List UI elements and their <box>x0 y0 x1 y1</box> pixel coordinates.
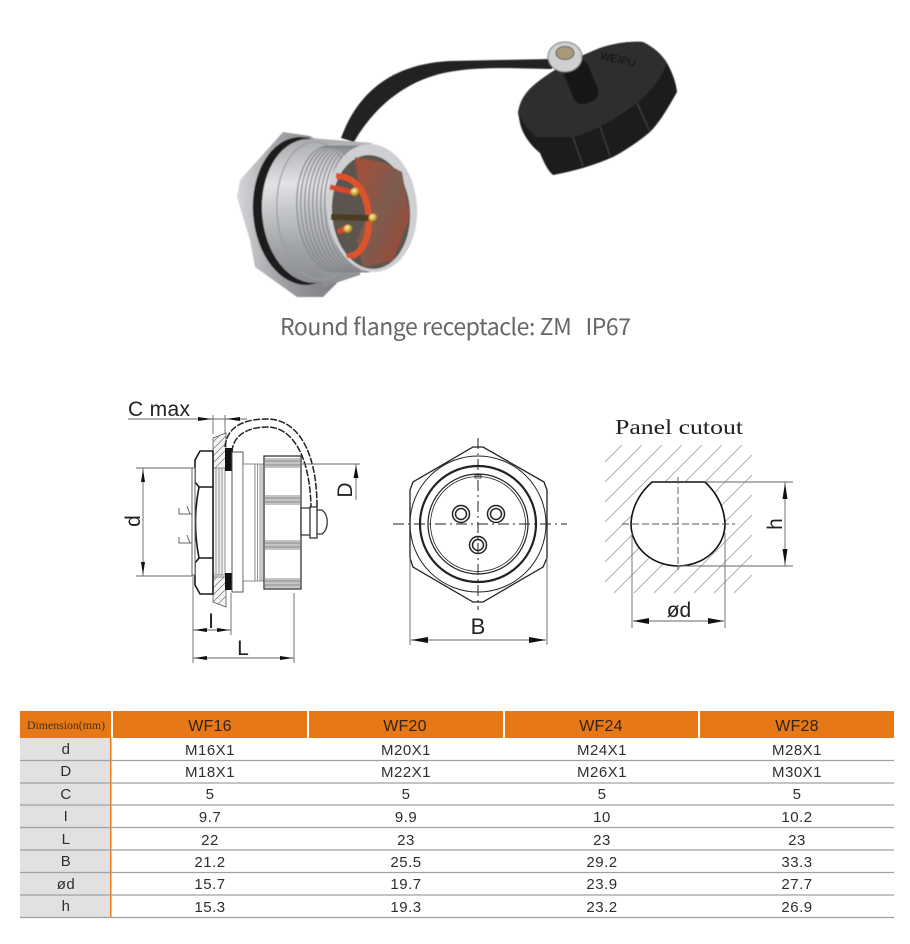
table: WF28 values: 23 <box>788 832 806 849</box>
table: WF24 values: 10 <box>593 809 611 826</box>
table: WF16 values: 21.2 <box>194 854 226 871</box>
side view: thread 2 <box>255 464 264 581</box>
table: WF16 values: 15.3 <box>194 899 226 916</box>
table: column accent <box>110 738 112 917</box>
table: WF28 values: 5 <box>793 786 801 803</box>
table: WF20 values: M22X1 <box>381 764 431 781</box>
table: WF16 values: 9.7 <box>199 809 221 826</box>
table: WF16 values: 5 <box>206 786 214 803</box>
side view: rear plate and pins <box>179 468 195 575</box>
dimension: h: h <box>764 518 787 530</box>
table: first column background <box>20 738 110 917</box>
table: WF20 values: 19.3 <box>390 899 422 916</box>
table: WF28 values <box>772 742 822 916</box>
dimension: I <box>193 575 231 663</box>
table: row labels: h <box>62 898 70 915</box>
photo: silver receptacle <box>237 132 421 297</box>
table: WF20 values <box>381 742 431 916</box>
table: WF20 values: 5 <box>402 786 410 803</box>
table: header row: WF16 <box>188 718 232 735</box>
side view: panel hatching <box>212 432 226 608</box>
table: header row: Dimension(mm) <box>27 718 105 732</box>
dimension: D <box>302 464 360 500</box>
dimension: B <box>410 558 547 645</box>
dimension: h <box>678 482 793 566</box>
dimension: ød: ød <box>667 599 691 622</box>
dimension: L <box>193 593 294 663</box>
table: WF28 values: 26.9 <box>781 899 813 916</box>
table: row labels: C <box>60 786 72 803</box>
cutout: centre lines <box>622 477 735 570</box>
product caption: Round flange receptacle: ZM IP67 <box>280 308 631 342</box>
table: WF28 values: 10.2 <box>781 809 813 826</box>
table: row labels: L <box>62 831 70 848</box>
table: header row <box>20 711 894 738</box>
table: WF16 values: M18X1 <box>185 764 235 781</box>
front view drawing <box>393 438 567 645</box>
photo: tether strap <box>341 59 552 142</box>
product photo: receptacle with cap <box>237 42 677 297</box>
table: WF20 values: M20X1 <box>381 742 431 759</box>
table: WF16 values: 22 <box>201 832 219 849</box>
dimension: L: L <box>237 637 249 660</box>
side view: dashed tether <box>225 419 317 507</box>
photo: black cap <box>518 42 677 175</box>
table: header row: WF20 <box>383 718 427 735</box>
table: WF24 values: 29.2 <box>586 854 618 871</box>
front view: concentric rings <box>410 456 546 592</box>
table: WF24 values: 23 <box>593 832 611 849</box>
table: WF28 values: M30X1 <box>772 764 822 781</box>
table: WF24 values <box>577 742 627 916</box>
front view: centre lines <box>393 438 567 610</box>
side view: black gaskets <box>225 448 232 590</box>
dimension: ød <box>632 533 725 628</box>
cutout: opening outline <box>631 482 725 566</box>
table: row labels: ød <box>57 876 75 893</box>
photo: black cap: WEIPU <box>599 50 637 70</box>
table: WF20 values: 23 <box>397 832 415 849</box>
table: WF24 values: M24X1 <box>577 742 627 759</box>
side view: body <box>243 464 255 581</box>
cutout heading: Panel cutout <box>615 415 743 439</box>
table: WF16 values <box>185 742 235 916</box>
dimension: D: D <box>334 482 357 498</box>
table: WF16 values: M16X1 <box>185 742 235 759</box>
dimension table <box>20 711 894 918</box>
table: WF20 values: 19.7 <box>390 876 422 893</box>
side view: flange <box>232 452 243 592</box>
side view drawing <box>122 398 360 663</box>
table: row labels: d <box>62 741 70 758</box>
table: row labels <box>57 741 75 915</box>
table: WF24 values: 23.2 <box>586 899 618 916</box>
table: WF24 values: 23.9 <box>586 876 618 893</box>
table: WF20 values: 25.5 <box>390 854 422 871</box>
table: WF24 values: M26X1 <box>577 764 627 781</box>
side view: cap stud <box>301 507 327 538</box>
table: row labels: I <box>64 808 68 825</box>
dimension: C max: C max <box>128 398 190 421</box>
side view: cap <box>264 456 301 589</box>
table: header row: WF28 <box>775 718 819 735</box>
dimension: I: I <box>208 610 214 633</box>
front view: hex outline <box>410 447 547 602</box>
table: header row: WF24 <box>579 718 623 735</box>
table: row labels: B <box>61 853 71 870</box>
dimension: C max <box>128 398 247 434</box>
table: WF28 values: M28X1 <box>772 742 822 759</box>
table: WF20 values: 9.9 <box>395 809 417 826</box>
front view: pin holes <box>452 506 504 554</box>
table: WF24 values: 5 <box>598 786 606 803</box>
dimension: d: d <box>122 515 145 527</box>
dimension: B: B <box>471 614 485 639</box>
side view: hex nut <box>195 451 213 594</box>
table: WF16 values: 15.7 <box>194 876 226 893</box>
table: WF28 values: 27.7 <box>781 876 813 893</box>
table: row labels: D <box>60 763 72 780</box>
dimension: d <box>122 468 192 576</box>
panel cutout drawing <box>605 415 793 628</box>
table: row lines <box>20 760 894 918</box>
cutout: hatching <box>605 445 752 602</box>
table: WF28 values: 33.3 <box>781 854 813 871</box>
side view: threaded section <box>213 468 225 575</box>
